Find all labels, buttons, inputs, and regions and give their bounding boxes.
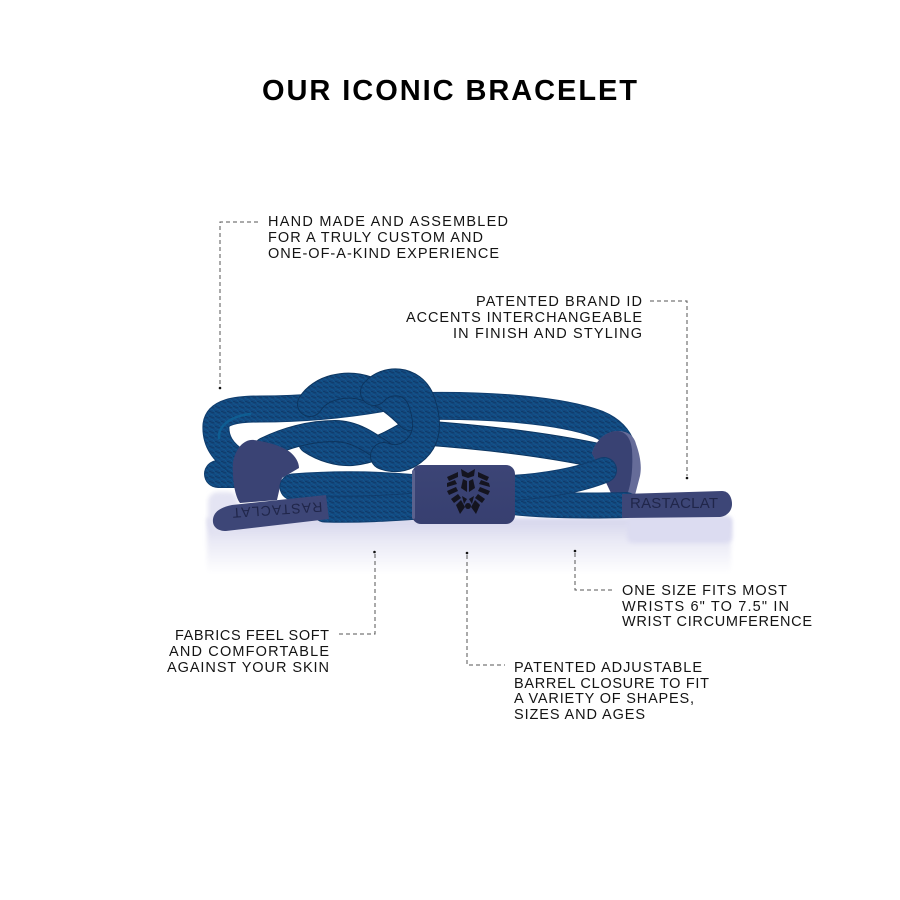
text: one size [622, 583, 812, 630]
leader line: fabrics [338, 554, 375, 634]
text: hand made: FOR A TRULY CUSTOM AND [268, 230, 483, 246]
back lower loop cord [218, 460, 250, 488]
adjustable barrel closure [412, 465, 515, 524]
right aglet tip [622, 491, 732, 518]
text: barrel closure: BARREL CLOSURE TO FIT [514, 676, 709, 692]
leader line: one size [575, 553, 612, 590]
text: brand id: ACCENTS INTERCHANGEABLE [406, 310, 642, 326]
right aglet lettering: RASTACLAT [630, 495, 718, 512]
text: brand id: PATENTED BRAND ID [476, 294, 642, 310]
text: barrel closure: PATENTED ADJUSTABLE [514, 660, 702, 676]
knot: crossing strand [265, 431, 390, 456]
callout: fabrics [167, 551, 376, 676]
text: fabrics: AGAINST YOUR SKIN [167, 660, 329, 676]
upper cord left of knot [216, 398, 385, 462]
right rubber end cap [592, 431, 641, 495]
leader line: brand id [650, 301, 687, 476]
leader line: hand made [220, 222, 258, 386]
knot [265, 382, 426, 458]
title: OUR ICONIC BRACELET [262, 75, 637, 107]
left aglet tip [213, 495, 329, 531]
text: one size: WRISTS 6" TO 7.5" IN [622, 599, 789, 615]
text: hand made [268, 214, 508, 262]
text: fabrics: AND COMFORTABLE [169, 644, 329, 660]
text: barrel closure: SIZES AND AGES [514, 707, 645, 723]
text: hand made: ONE-OF-A-KIND EXPERIENCE [268, 246, 499, 262]
front cords left [293, 485, 418, 509]
callout: brand id [406, 294, 688, 479]
bracelet [213, 382, 732, 531]
lower right cord from knot [425, 433, 605, 457]
knot: upper loop [310, 386, 410, 418]
text: fabrics [167, 628, 329, 676]
left aglet lettering: RASTACLAT [232, 499, 323, 521]
text: barrel closure [514, 660, 709, 723]
leader line: barrel closure [467, 555, 505, 665]
left rubber end cap [233, 440, 299, 503]
callout: barrel closure [466, 552, 709, 723]
lion head logo [447, 469, 490, 514]
bracelet reflection [207, 492, 732, 574]
text: hand made: HAND MADE AND ASSEMBLED [268, 214, 508, 230]
callout: hand made [219, 214, 508, 389]
text: one size: WRIST CIRCUMFERENCE [622, 614, 812, 630]
knot: wrapping band [374, 382, 426, 458]
knot: under strand [310, 430, 412, 454]
text: fabrics: FABRICS FEEL SOFT [175, 628, 329, 644]
callout: one size [574, 550, 812, 630]
front cords right [512, 470, 626, 506]
text: barrel closure: A VARIETY OF SHAPES, [514, 691, 694, 707]
text: brand id [406, 294, 642, 342]
text: brand id: IN FINISH AND STYLING [453, 326, 642, 342]
text: one size: ONE SIZE FITS MOST [622, 583, 787, 599]
upper cord right of knot [425, 406, 622, 448]
